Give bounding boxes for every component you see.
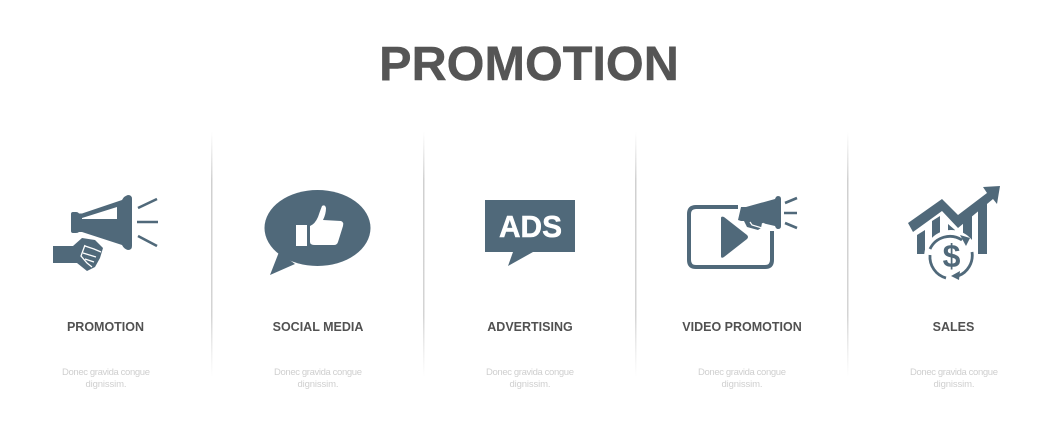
description: dignissim.	[298, 379, 338, 390]
icon: ADS speech bubble	[485, 200, 575, 266]
icon: growth chart with dollar: $	[943, 238, 961, 274]
description: Donec gravida congue	[274, 367, 362, 378]
label: SALES	[933, 320, 974, 334]
icon: video player with megaphone	[689, 196, 797, 267]
description	[274, 367, 362, 390]
label: SOCIAL MEDIA	[273, 320, 363, 334]
description: dignissim.	[510, 379, 550, 390]
description: dignissim.	[934, 379, 974, 390]
title: PROMOTION	[379, 37, 679, 91]
description: Donec gravida congue	[698, 367, 786, 378]
description: Donec gravida congue	[486, 367, 574, 378]
icon: megaphone in hand	[53, 195, 158, 271]
description	[698, 367, 786, 390]
panel: video promotion	[682, 196, 802, 390]
description: Donec gravida congue	[910, 367, 998, 378]
description	[62, 367, 150, 390]
icon: growth chart with dollar	[908, 186, 1000, 284]
description	[486, 367, 574, 390]
label: PROMOTION	[67, 320, 144, 334]
panel: social media	[264, 190, 370, 390]
panel: promotion	[53, 195, 158, 390]
description: dignissim.	[86, 379, 126, 390]
description: Donec gravida congue	[62, 367, 150, 378]
description	[910, 367, 998, 390]
panel: advertising	[485, 200, 575, 390]
icon: thumbs up speech bubble	[264, 190, 370, 275]
label: VIDEO PROMOTION	[682, 320, 802, 334]
description: dignissim.	[722, 379, 762, 390]
label: ADVERTISING	[487, 320, 573, 334]
panel: sales	[908, 186, 1000, 390]
icon: ADS speech bubble: ADS	[499, 209, 562, 244]
